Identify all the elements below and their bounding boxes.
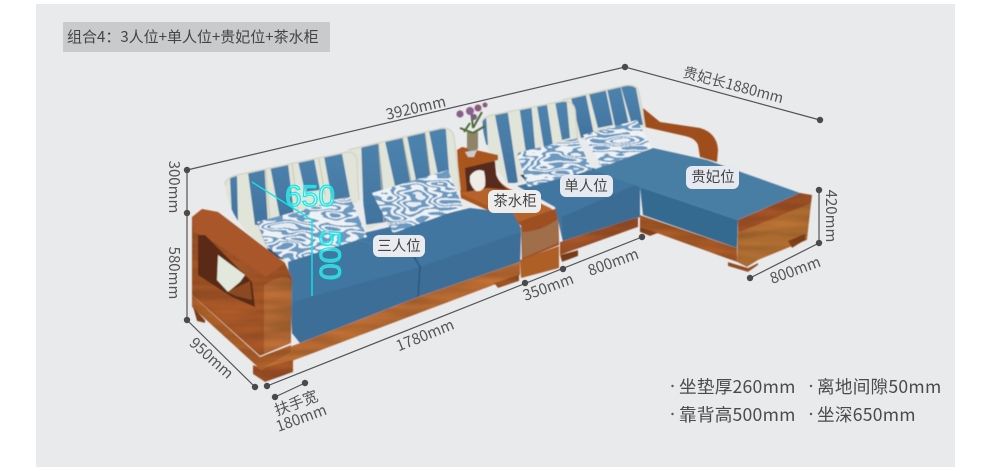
seat tag: 三人位: 三人位 [377, 235, 421, 256]
dimension labels: 180mm [273, 399, 330, 437]
dimension labels [164, 61, 842, 437]
header tag: 组合4：3人位+单人位+贵妃位+茶水柜 [67, 26, 319, 47]
spec notes: 坐垫厚260mm [679, 374, 796, 399]
dimension labels: 300mm [164, 161, 185, 213]
left armrest [192, 209, 292, 370]
dimension labels: 580mm [164, 247, 185, 299]
seat tag: 贵妃位: 贵妃位 [691, 166, 735, 187]
tea cabinet [457, 147, 559, 278]
dimension labels: 1780mm [393, 314, 457, 356]
jug [470, 170, 485, 191]
plant [456, 102, 488, 157]
spec notes [671, 374, 942, 427]
cyan annotation 500: 500 [313, 230, 346, 280]
dimension labels: 800mm [767, 251, 824, 289]
wood base [253, 193, 812, 382]
seat tag: 茶水柜: 茶水柜 [493, 190, 537, 211]
teapot [516, 185, 528, 193]
sofa illustration [192, 78, 812, 382]
dimension labels: 420mm [821, 190, 842, 242]
cyan annotation 650: 650 [285, 180, 335, 213]
spec notes: 离地间隙50mm [817, 374, 942, 399]
back cushions left [224, 127, 462, 264]
dimension labels: 贵妃长1880mm [681, 61, 786, 108]
dimension labels: 3920mm [384, 91, 448, 125]
right armrest [643, 108, 718, 162]
header tag [63, 22, 330, 52]
pillow shadows [258, 150, 625, 262]
dimension labels: 350mm [520, 268, 577, 306]
pillows [257, 120, 652, 262]
dimension labels: 800mm [585, 243, 642, 281]
seat cushions [288, 148, 800, 343]
dimension lines [184, 64, 823, 400]
dimension labels: 950mm [185, 332, 238, 383]
spec notes: 靠背高500mm [679, 402, 796, 427]
cyan annotation 650 [252, 180, 335, 296]
back cushions right [481, 84, 646, 184]
seat tag: 单人位: 单人位 [564, 175, 608, 196]
dimension labels: 扶手宽 [271, 385, 321, 420]
spec notes: 坐深650mm [817, 402, 916, 427]
